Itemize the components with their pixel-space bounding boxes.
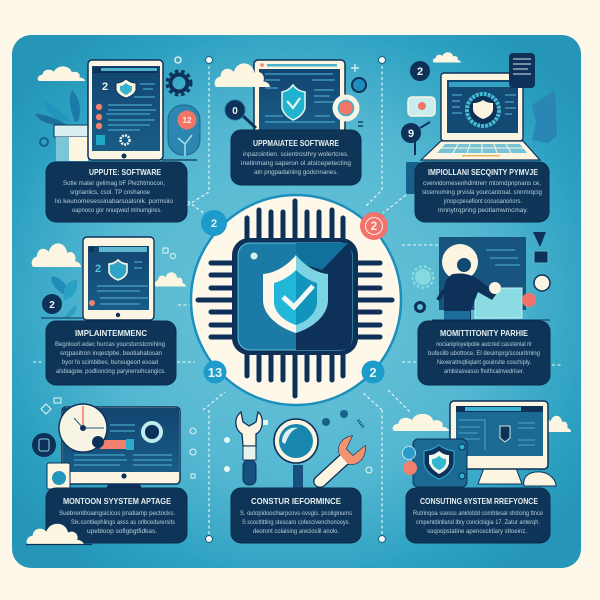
card: implementation: srqpasitron inqestpbe. beotiahatosan — [60, 351, 162, 357]
icon: side shape — [532, 90, 557, 143]
card: consulting system frequency — [406, 488, 550, 543]
numbered badges: 13 — [208, 365, 222, 380]
icon: tablet — [88, 60, 163, 160]
card: upgrade software: inetinmang saperon ol atslcepetecting — [241, 161, 351, 167]
icon: cloud right — [155, 272, 186, 286]
icon: wrench right — [314, 436, 365, 487]
card: construct performance — [231, 488, 361, 543]
icon: dark gear — [416, 302, 424, 312]
icon: cloud over card — [26, 524, 92, 545]
icon: cloud left — [393, 414, 449, 431]
icon: number bubble 2 — [410, 61, 430, 81]
card: important security patch: mnnytrqpring peotlamwmcmay. — [438, 208, 528, 214]
card: monitor patch: Nexeratmqtiiqlant gouinslte coschiply. — [437, 360, 531, 366]
ledge under card — [406, 162, 420, 194]
section: update software 2 illustration — [215, 60, 366, 132]
icon: shield device — [413, 439, 467, 487]
card: update software: srgrianlics, csol. TP cnshanoe — [70, 190, 151, 196]
icon: small outlines — [41, 398, 196, 478]
icon: plus — [351, 64, 359, 72]
card: upgrade software: inpazointien. scientrosthry wolertcres. — [243, 152, 349, 158]
section: tools illustration — [224, 410, 372, 490]
icon: shield — [282, 85, 305, 120]
card: monitor system uptime: Slx.conttiephlings axss as orlbcedurersits — [71, 520, 175, 526]
section: security patch illustration — [401, 52, 557, 194]
icon: side frame — [534, 251, 548, 263]
icon: dark screen — [439, 237, 526, 310]
card: implementation — [46, 321, 176, 385]
card: consulting system frequency: CONSUTING 6YSTEM RREFYONCE — [420, 496, 538, 506]
icon: coral status pod — [162, 105, 200, 160]
card: construct performance: S. outopidoochiarpcovs-svsgis. pcoliginums — [240, 511, 352, 517]
card: implementation: alsbiagow. podlioncing parynenohcanglcs. — [56, 369, 166, 375]
chip pins — [198, 201, 392, 396]
central chip emblem — [191, 195, 401, 405]
icon: tablet: 2 — [95, 263, 101, 275]
icon: teal gear — [412, 266, 434, 288]
card: consulting system frequency: soqoopstatine apencecktiary sttoeinz. — [427, 529, 527, 535]
icon: number bubble 9 — [401, 122, 430, 155]
icon: small device — [47, 463, 70, 489]
card: consulting system frequency: Rutrinqoa ssesss anklotdd combtesal strdcing ttnce — [413, 511, 544, 517]
icon: desk line — [432, 319, 550, 321]
icon: key bubble — [225, 100, 256, 128]
icon: blue marks — [322, 410, 364, 428]
icon: cloud — [215, 63, 270, 87]
icon: note — [509, 53, 535, 88]
card: construct performance: CONSTUR IEFORMINCE — [251, 496, 341, 506]
icon: cloud right — [540, 416, 571, 432]
icon: coral bubble — [332, 94, 363, 126]
icon: side drop — [533, 232, 546, 247]
icon: gear — [167, 71, 191, 95]
dashed connectors — [33, 56, 562, 542]
card: monitor patch: MOMITTITONITY PARHIE — [440, 328, 528, 338]
icon: plant — [35, 90, 96, 161]
icon: tablet — [83, 237, 154, 320]
icon: number bubble 2: 2 — [417, 66, 423, 78]
card: monitor system uptime — [46, 488, 187, 543]
numbered badges — [201, 210, 388, 384]
card: important security patch: IMPIOLLANI SECQINTY PYMVJE — [428, 167, 538, 177]
card: upgrade software — [231, 130, 361, 185]
icon: leaves — [41, 276, 84, 318]
icon: coral dot — [522, 293, 536, 307]
icon: coral status pod: 12 — [183, 116, 192, 125]
section: monitor system illustration — [32, 398, 196, 489]
numbered badges: 2 — [211, 218, 217, 230]
icon: small marks — [224, 420, 372, 473]
icon: cloud — [38, 66, 85, 81]
icon: mouse — [524, 472, 556, 486]
card: monitor patch — [418, 321, 550, 385]
numbered badges: 2 — [369, 365, 377, 380]
card: update software — [46, 162, 187, 222]
card: update software: Sotle mater gelimag bF Plezhtmocon, — [63, 181, 165, 187]
icon: magnifier — [274, 419, 318, 490]
card: monitor patch: nocianiployelpotie autcred casstenlal rlr — [436, 342, 532, 348]
icon: ring badge — [352, 78, 366, 92]
card: monitor patch: amtistasvasso fhothcatnvedriser. — [444, 369, 524, 375]
card: update software: oapnoco gor nnuqwed mlnumgires. — [72, 208, 162, 214]
icon: number bubble: 2 — [49, 300, 55, 311]
icon: cloud left — [32, 243, 81, 267]
icon: clock — [59, 404, 107, 452]
card: implementation: byor fo scimbibes, bunsugeort esoad — [62, 360, 158, 366]
card: update software: lio keunomesessinabarsoalsnik. pormsiio — [55, 199, 174, 205]
icon: number bubble — [42, 294, 62, 314]
numbered badges: 2 — [371, 219, 378, 233]
icon: dark app circle — [32, 433, 56, 457]
chip body — [232, 238, 358, 355]
icon: desktop — [450, 401, 548, 484]
icon: gear — [143, 423, 161, 441]
icon: side ring — [534, 275, 550, 291]
icon: speech bubble — [408, 97, 435, 116]
icon: small shapes — [163, 248, 176, 258]
icon: small cog — [40, 138, 48, 146]
card: construct performance: deoront colaising arecioslil anolo. — [253, 529, 339, 535]
section: implementation illustration — [32, 237, 186, 320]
card: important security patch: cvervidomesenhdintrerr mtomdpnpnans ce, — [423, 181, 541, 187]
card: implementation: Begnloorl.edec hurcas yourstunstcmihing — [55, 342, 165, 348]
icon: cloud — [433, 52, 461, 62]
icon: blue tag — [402, 446, 416, 460]
section: update software illustration — [35, 57, 200, 161]
emblem circle — [191, 195, 401, 405]
card: monitor patch: bufeslib ubottoce, El desimprg/scouritming — [428, 351, 540, 357]
icon: desktop monitor — [62, 407, 180, 489]
card: important security patch — [415, 162, 549, 222]
card: monitor system uptime: upebloop soflgbgtfidkas. — [87, 529, 157, 535]
card: important security patch: jmnpcpesefiont cocuoanoriors. — [443, 199, 522, 205]
card: monitor system uptime: MONTOON SYYSTEM APTAGE — [63, 496, 171, 506]
card: important security patch: slcemuming prvisla yourcantroal. snnmrqcig — [422, 190, 542, 196]
icon: tablet: 2 — [102, 81, 108, 93]
shield — [263, 255, 328, 333]
section: monitoring illustration — [412, 232, 550, 321]
section: consulting system illustration — [393, 401, 571, 487]
card: monitor system uptime: Suebrentitoaingsiclcos pnatiamp pectocks. — [59, 511, 175, 517]
icon: key bubble: 0 — [232, 106, 238, 117]
card: update software: UPPUTE: SOFTWARE — [89, 167, 161, 177]
icon: browser window — [254, 60, 345, 132]
card: upgrade software: UPPMAIATEE SOFTWARE — [253, 138, 339, 148]
card: implementation: IMPLAINTEMMENC — [75, 328, 147, 338]
card: upgrade software: atn pngpadaining godcnnanes. — [254, 170, 338, 176]
icon: laptop — [421, 73, 540, 160]
card: consulting system frequency: cmpentdinlland lbry conclckigia 17. Zatur anterqh. — [416, 520, 540, 526]
icon: number bubble 9: 9 — [408, 128, 414, 140]
card: construct performance: S scocltitting stescaro cofeccivenchonooys. — [242, 520, 350, 526]
icon: wrench left — [236, 412, 262, 485]
icon: person — [438, 244, 501, 321]
icon: light screen — [475, 288, 522, 318]
icon: coral tag — [403, 461, 417, 475]
icon: small ring — [175, 57, 181, 63]
